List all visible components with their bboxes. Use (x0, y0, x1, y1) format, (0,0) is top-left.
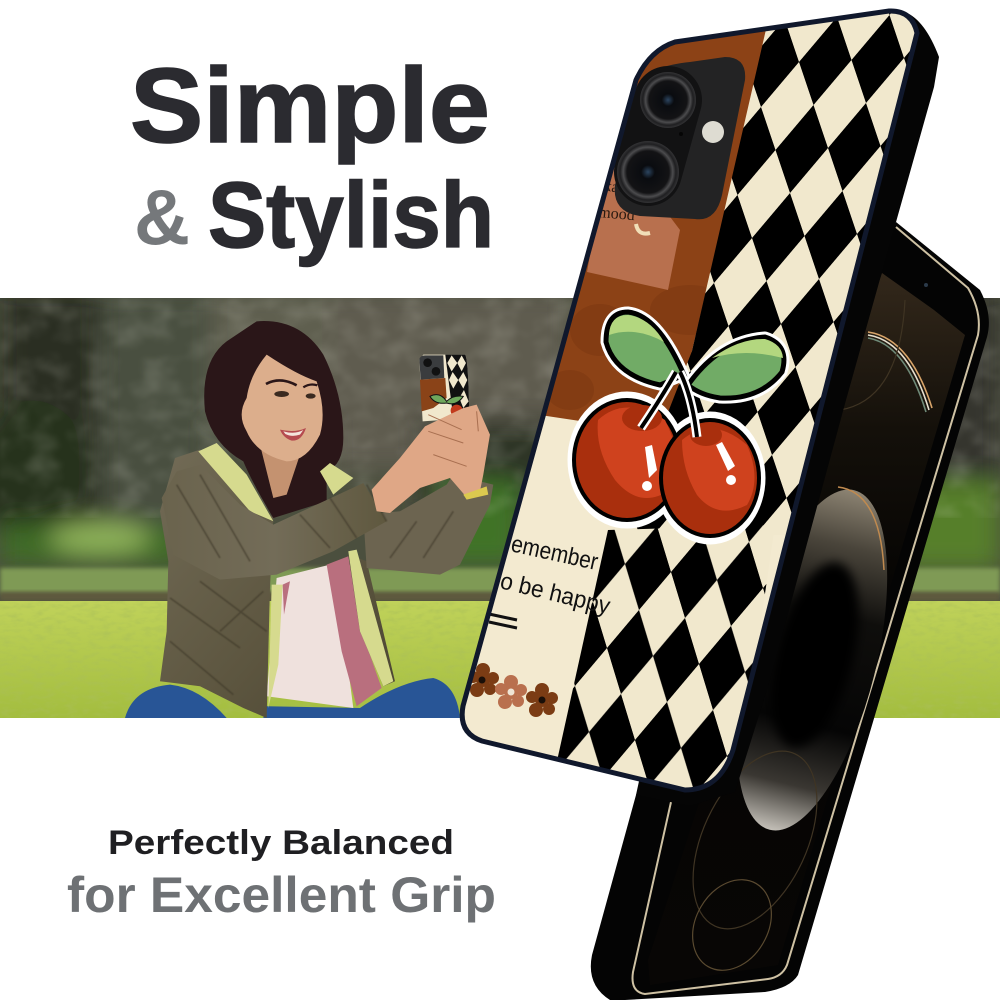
neck (261, 450, 299, 498)
cream base (464, 328, 786, 757)
caption: for Excellent Grip: for Excellent Grip (67, 867, 496, 923)
left leaf (606, 312, 684, 385)
foliage texture (0, 298, 1000, 518)
far sleeve (363, 475, 493, 575)
park background (0, 290, 1000, 718)
grass (0, 601, 1000, 718)
woman taking a selfie (125, 321, 493, 718)
case slogan: emember (509, 530, 600, 576)
rainbow arc (868, 332, 932, 412)
brown blotches (550, 285, 706, 410)
right leaf highlight (712, 339, 783, 358)
small case text (600, 184, 634, 220)
sticker white outline (573, 312, 784, 539)
case black side wall (636, 12, 939, 806)
right cherry (661, 420, 759, 536)
jacket lining (198, 443, 393, 708)
jacket body (160, 450, 395, 718)
double bar (489, 614, 517, 628)
screen camera dot (924, 283, 928, 287)
heading: Stylish: Stylish (208, 163, 494, 267)
camera bump (615, 57, 745, 219)
light tan block (587, 168, 680, 290)
mic dot (679, 132, 683, 136)
flash (702, 121, 724, 143)
front phone case (440, 0, 940, 810)
plaid shirt (283, 556, 382, 706)
heading: ampersand: & (134, 173, 190, 261)
small phone in hand (419, 355, 469, 421)
black phone body (591, 222, 989, 1000)
left cherry (574, 400, 680, 520)
cherry shines (642, 442, 736, 491)
near sleeve (162, 483, 386, 580)
orb highlight edge (838, 487, 884, 570)
bracelet (463, 486, 488, 500)
lower checker pattern (558, 525, 766, 787)
sleeve quilting (170, 475, 453, 695)
lifestyle photo band (0, 290, 1000, 718)
lens 2 (617, 141, 679, 203)
brown panel (540, 30, 767, 440)
eyes and mouth (266, 380, 317, 441)
cherry dents (622, 405, 722, 446)
park path (0, 568, 1000, 594)
grass texture (0, 601, 1000, 718)
case slogan: o be happy (498, 568, 613, 620)
hair back (204, 321, 343, 518)
heading: Simple: Simple (130, 47, 490, 165)
back phone with gold frame (591, 222, 989, 1000)
orb inner shading (755, 554, 875, 756)
upper checker pattern (637, 14, 910, 530)
face (242, 355, 323, 461)
smile mark (636, 224, 650, 234)
cherry sticker (573, 312, 784, 539)
lens 1 (640, 72, 696, 128)
small case text: ka (602, 177, 620, 197)
caption: Perfectly Balanced: Perfectly Balanced (108, 824, 454, 862)
screen (648, 273, 965, 985)
small case text: mood (598, 204, 635, 224)
case navy rim (462, 11, 917, 790)
stems (641, 372, 697, 437)
jeans (125, 678, 460, 718)
faint wallpaper arcs (668, 300, 905, 985)
hands (372, 405, 490, 513)
printed back panel (464, 14, 914, 788)
gold frame line (632, 227, 979, 994)
lens housing (648, 100, 668, 172)
case slogan (501, 540, 611, 617)
flower icons (467, 663, 558, 717)
left leaf highlight (609, 315, 664, 342)
wallpaper orb (708, 475, 916, 845)
right leaf (688, 337, 784, 398)
shirt (267, 565, 353, 708)
